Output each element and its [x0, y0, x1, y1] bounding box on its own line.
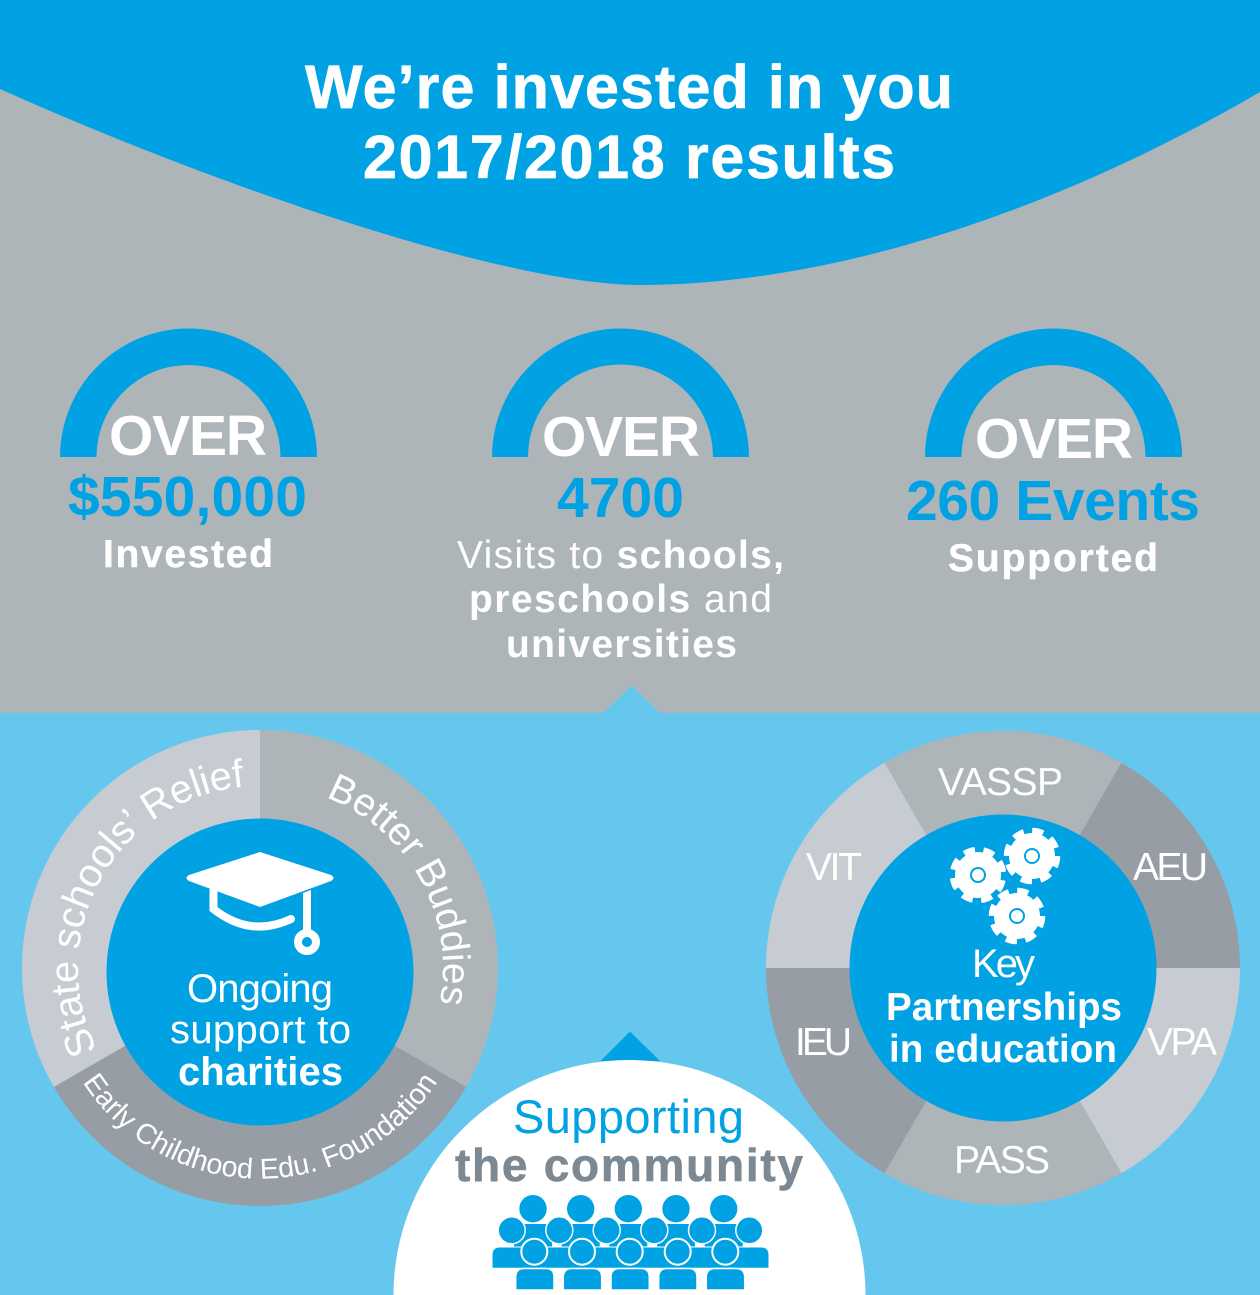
figure: $550,000: [68, 465, 307, 529]
icon: graduation cap: [186, 852, 334, 951]
label: Better Buddies: Better Buddies: [328, 774, 471, 1004]
segment labels: [795, 761, 1217, 1182]
pointer triangle: [600, 1032, 660, 1061]
light blue lower panel: [0, 686, 1260, 1295]
stat: over 4700 visits: [457, 328, 784, 666]
segment labels: VIT: [806, 846, 862, 889]
segment: VASSP: [884, 731, 1122, 968]
segment: Early Childhood Edu. Foundation: [54, 968, 466, 1206]
title: We’re invested in you: [305, 53, 953, 121]
text: ongoing support to charities: charities: [178, 1050, 343, 1094]
segment: AEU: [1003, 763, 1240, 968]
figure: 260 Events: [906, 469, 1200, 533]
stat: over 260 events: [906, 328, 1200, 580]
caption: universities: [506, 623, 737, 666]
subheading: the community: [455, 1139, 803, 1191]
caption: Visits to schools,: [457, 534, 784, 577]
caption: Invested: [103, 533, 273, 576]
segment labels: AEU: [1133, 846, 1208, 889]
centre disc: [106, 818, 414, 1126]
heading: Supporting: [513, 1090, 744, 1143]
segment labels: VASSP: [938, 761, 1063, 804]
dome: supporting the community: [394, 1060, 866, 1295]
centre disc: [850, 814, 1156, 1122]
label: State schools' Relief: State schools’ Relief: [53, 758, 242, 1056]
label: over: OVER: [542, 405, 700, 469]
icon: gears: [950, 832, 1056, 940]
segment: VPA: [1003, 968, 1240, 1173]
text: ongoing support to charities: Ongoing: [187, 967, 333, 1011]
segment: IEU: [766, 968, 1003, 1173]
segment: VIT: [766, 763, 1003, 968]
label: Early Childhood Edu. Foundation: Early Childhood Edu. Foundation: [84, 1072, 437, 1179]
title: 2017/2018 results: [363, 123, 895, 191]
gauge arc: [925, 328, 1182, 457]
ring: charities: [22, 730, 498, 1206]
segment: PASS: [884, 968, 1122, 1205]
segment: Better Buddies: [260, 730, 498, 1087]
figure: 4700: [557, 466, 684, 530]
icon: audience: [492, 1195, 769, 1290]
caption: [457, 534, 784, 666]
gauge arc: [60, 328, 317, 457]
segment labels: VPA: [1147, 1021, 1217, 1064]
title: [305, 53, 953, 191]
segment: State schools' Relief: [22, 730, 260, 1087]
header banner: [0, 0, 1260, 285]
text: key partnerships in education: [886, 942, 1122, 1071]
text: key partnerships in education: Key: [972, 942, 1035, 986]
label: over: OVER: [975, 407, 1133, 471]
text: key partnerships in education: in education: [889, 1028, 1117, 1071]
label: over: OVER: [109, 404, 267, 468]
text: ongoing support to charities: support to: [170, 1008, 351, 1052]
ring: partnerships: [766, 731, 1240, 1205]
segment labels: PASS: [954, 1139, 1050, 1182]
gauge arc: [492, 328, 749, 457]
segment labels: IEU: [795, 1021, 852, 1064]
text: ongoing support to charities: [170, 967, 351, 1094]
grey statistics background: [0, 0, 1260, 713]
text: key partnerships in education: Partnerships: [886, 986, 1122, 1029]
caption: preschools and: [469, 578, 772, 621]
caption: Supported: [948, 537, 1158, 580]
stat: over $550,000 invested: [60, 328, 317, 576]
